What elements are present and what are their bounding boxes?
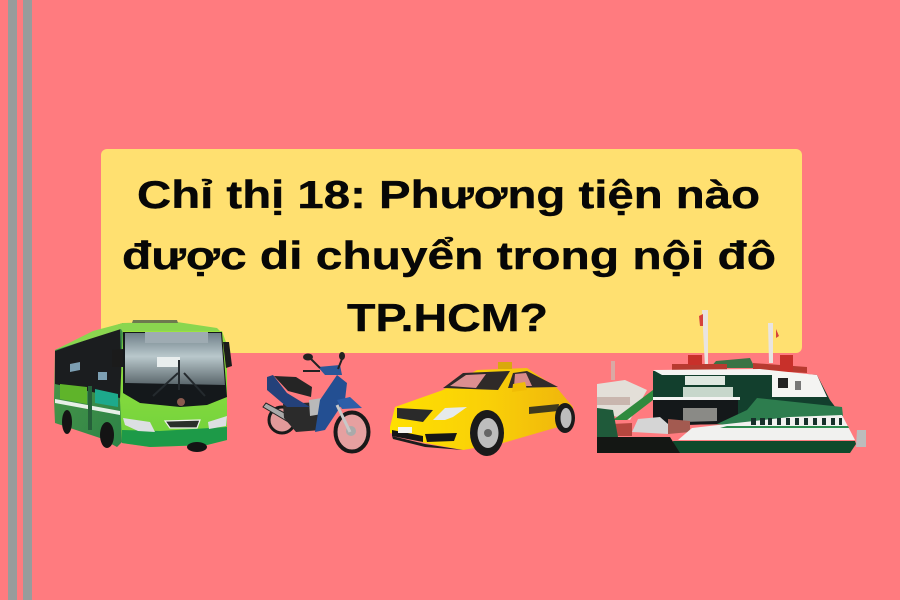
body: [390, 368, 573, 450]
title panel: [101, 149, 802, 353]
headlights and grille: [123, 418, 155, 432]
rear blue body and seat: [267, 375, 310, 407]
cars and passengers: [612, 423, 632, 436]
title text: được di chuyển trong nội đô: [122, 235, 776, 278]
wheels: [100, 422, 114, 448]
title text: Chỉ thị 18: Phương tiện nào: [137, 174, 760, 217]
roof: [55, 322, 222, 350]
side body: [54, 323, 124, 447]
front blue shield: [315, 375, 347, 432]
front wheel: [470, 410, 504, 456]
mirror: [512, 382, 527, 392]
title text: [122, 174, 776, 340]
rear wheel: [269, 407, 295, 433]
icon: green bus: [54, 320, 232, 452]
car deck: [653, 400, 738, 426]
superstructure: [653, 370, 842, 425]
white hull: [678, 415, 855, 440]
icon: ferry: [597, 310, 866, 453]
mirrors: [223, 342, 232, 368]
mirrors: [303, 354, 313, 360]
green ramp: [613, 390, 653, 420]
title text: TP.HCM?: [347, 297, 548, 340]
windshield: [123, 332, 227, 407]
icon: yellow taxi: [390, 362, 575, 456]
hull windows: [751, 418, 842, 425]
icon: motorbike: [263, 352, 368, 452]
taxi stripe: [529, 404, 559, 414]
muffler and frame: [263, 403, 294, 423]
masts: [702, 310, 708, 367]
front face: [120, 331, 227, 447]
front wheel: [336, 412, 368, 452]
rear wheel: [555, 403, 575, 433]
lower hull: [673, 441, 856, 453]
top deck equipment: [710, 358, 755, 368]
green band: [717, 398, 843, 425]
taxi roof sign: [498, 362, 512, 369]
grille and lights: [397, 408, 433, 422]
windows: [443, 371, 510, 390]
background vessel: [597, 380, 647, 420]
